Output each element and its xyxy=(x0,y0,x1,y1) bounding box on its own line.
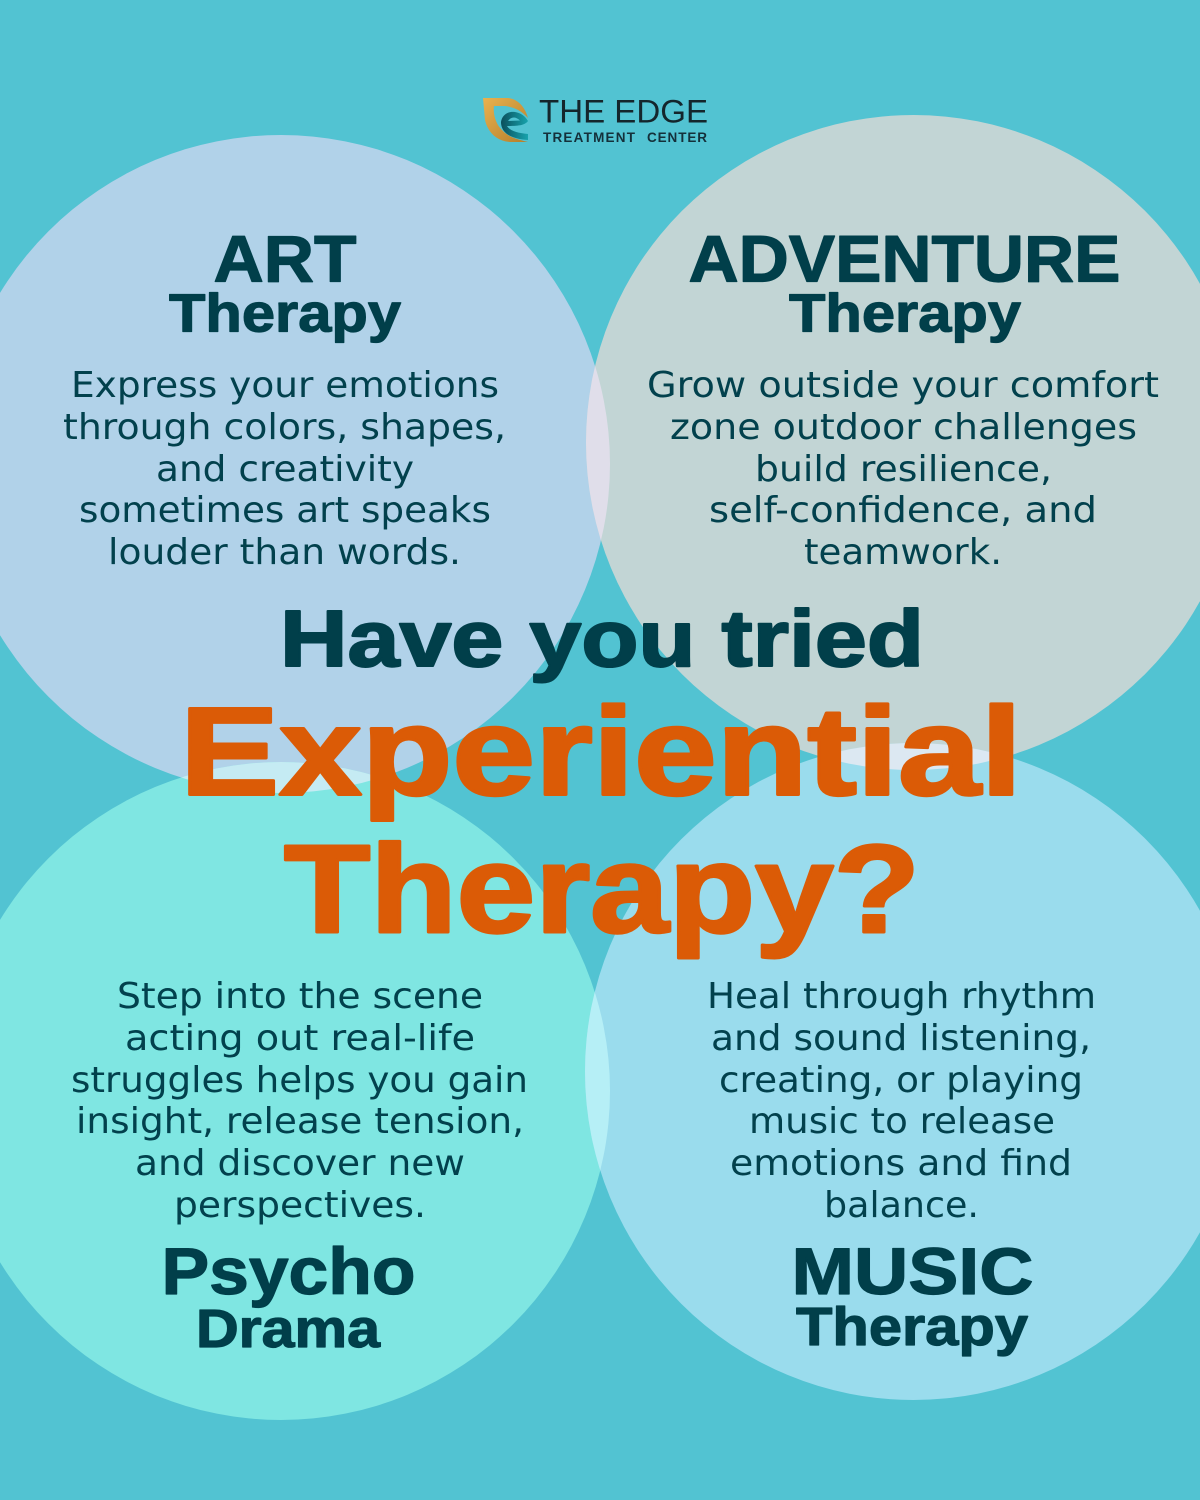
panel text: music therapy xyxy=(707,976,1096,1357)
body text: music therapy description: emotions and find xyxy=(730,1143,1072,1184)
icon: gold and teal leaf e xyxy=(483,98,528,142)
body text: psychodrama description: and discover new xyxy=(135,1143,465,1184)
heading: MUSIC Therapy xyxy=(792,1235,1034,1357)
body text: psychodrama description: struggles helps you gain xyxy=(71,1060,528,1101)
body text: music therapy description: Heal through rhythm xyxy=(707,976,1096,1017)
logo tagline: TREATMENT xyxy=(543,130,636,145)
body text: art therapy description: through colors, shapes, xyxy=(63,407,506,448)
body text: psychodrama description: insight, release tension, xyxy=(76,1101,524,1142)
heading: ADVENTURE Therapy xyxy=(688,222,1120,344)
heading: MUSIC Therapy: Therapy xyxy=(796,1298,1028,1357)
heading: MUSIC Therapy: MUSIC xyxy=(792,1235,1034,1308)
heading: Psycho Drama xyxy=(162,1235,416,1359)
heading: ADVENTURE Therapy: ADVENTURE xyxy=(688,222,1120,296)
overlap: psychodrama and music xyxy=(585,992,610,1170)
body text: music therapy description: and sound listening, xyxy=(711,1018,1091,1059)
overlap: adventure and music xyxy=(841,743,990,770)
heading: Psycho Drama: Psycho xyxy=(162,1235,416,1308)
body text: psychodrama description xyxy=(71,976,528,1226)
panel: adventure therapy circle xyxy=(586,115,1200,770)
body text: art therapy description: Express your emotions xyxy=(71,365,499,406)
body text: art therapy description: louder than words. xyxy=(108,532,461,573)
body text: adventure therapy description: Grow outside your comfort xyxy=(647,365,1159,406)
body text: music therapy description: creating, or playing xyxy=(719,1060,1083,1101)
panel: art therapy circle xyxy=(0,135,610,793)
body text: adventure therapy description: self-confidence, and xyxy=(709,490,1097,531)
title: Have you tried Experiential Therapy? xyxy=(180,594,1022,959)
heading: ART Therapy: Therapy xyxy=(169,284,401,344)
title line: Experiential: Experiential xyxy=(180,682,1022,822)
panel text: adventure therapy xyxy=(647,222,1159,573)
title line: Have you tried: Have you tried xyxy=(280,594,924,683)
heading: ART Therapy: ART xyxy=(214,222,356,296)
panel: music therapy circle xyxy=(585,743,1200,1400)
body text: music therapy description xyxy=(707,976,1096,1226)
body text: psychodrama description: Step into the scene xyxy=(117,976,483,1017)
body text: psychodrama description: perspectives. xyxy=(174,1185,426,1226)
logo tagline xyxy=(543,130,707,145)
heading: Psycho Drama: Drama xyxy=(196,1300,381,1359)
heading: ADVENTURE Therapy: Therapy xyxy=(789,284,1021,344)
body text: adventure therapy description: zone outdoor challenges xyxy=(670,407,1137,448)
body text: psychodrama description: acting out real-life xyxy=(125,1018,475,1059)
title line: Therapy?: Therapy? xyxy=(284,820,920,959)
overlap: art and psychodrama xyxy=(182,762,370,793)
panel text: psychodrama xyxy=(71,976,528,1359)
heading: ART Therapy xyxy=(169,222,401,344)
overlap: art and adventure xyxy=(586,366,610,540)
body text: adventure therapy description: build resilience, xyxy=(755,449,1052,490)
logo tagline: CENTER xyxy=(647,130,707,145)
panel: psychodrama circle xyxy=(0,762,610,1420)
body text: adventure therapy description xyxy=(647,365,1159,573)
body text: music therapy description: balance. xyxy=(824,1185,979,1226)
panel text: art therapy xyxy=(63,222,506,573)
body text: adventure therapy description: teamwork. xyxy=(804,532,1002,573)
body text: art therapy description xyxy=(63,365,506,573)
body text: art therapy description: sometimes art speaks xyxy=(79,490,491,531)
body text: music therapy description: music to release xyxy=(749,1101,1055,1142)
logo: The Edge Treatment Center xyxy=(483,94,708,145)
body text: art therapy description: and creativity xyxy=(156,449,414,490)
logo wordmark: THE EDGE xyxy=(539,94,708,130)
